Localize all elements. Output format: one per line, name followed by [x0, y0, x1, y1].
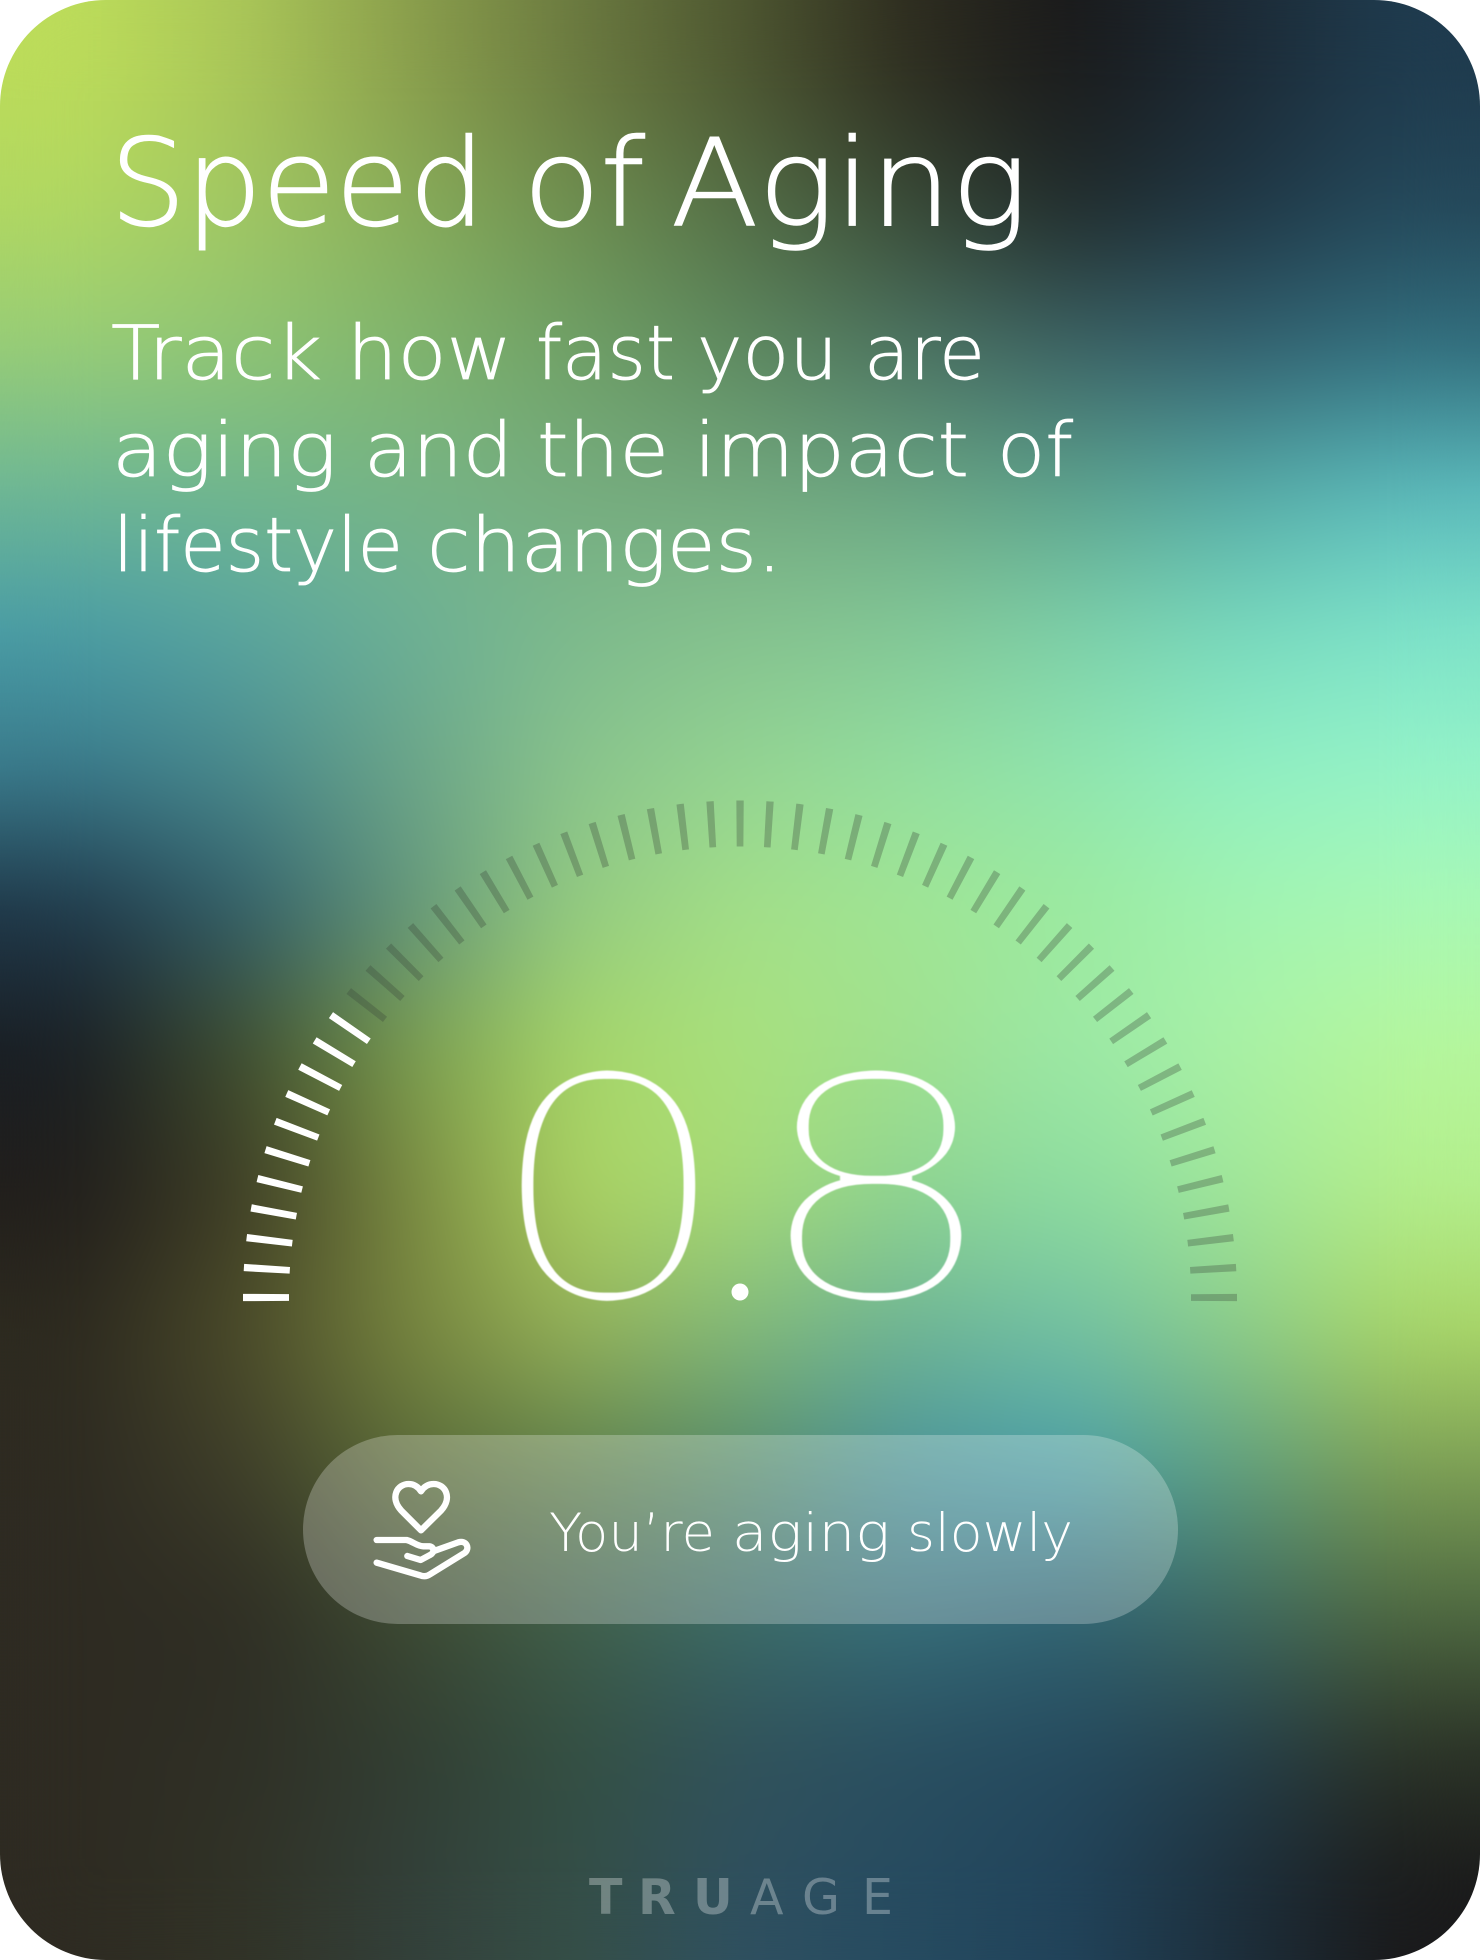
status label: [550, 1511, 1070, 1562]
gauge value: .: [679, 1012, 806, 1372]
gauge remaining ticks: [346, 800, 1237, 1302]
icon: heart in open hand: [377, 1484, 467, 1576]
subtitle text block: aging: [112, 406, 337, 494]
title: Aging: [671, 115, 1028, 254]
brand wordmark: TRU AGE: [589, 1869, 893, 1926]
gauge value: 8: [749, 1012, 1003, 1372]
status label: You’re: [549, 1503, 715, 1564]
status pill: [303, 1435, 1178, 1624]
foreground content: [112, 132, 1237, 1914]
gauge: semicircle tick dial: [243, 800, 1237, 1302]
gauge filled ticks: [264, 1025, 354, 1301]
status label: aging: [732, 1503, 890, 1564]
title: of: [523, 115, 645, 254]
subtitle text block: the: [537, 406, 669, 494]
subtitle text block: [111, 309, 1074, 589]
subtitle text block: fast: [536, 309, 675, 397]
subtitle text block: how: [347, 309, 512, 397]
subtitle text block: changes.: [427, 501, 782, 589]
gauge value: 0: [482, 1012, 736, 1372]
status label: slowly: [907, 1503, 1073, 1564]
subtitle text block: Track: [111, 309, 322, 397]
subtitle text block: you: [697, 309, 838, 397]
gauge value: [521, 1070, 962, 1302]
subtitle text block: and: [364, 406, 513, 494]
title: Speed: [110, 115, 485, 254]
subtitle text block: lifestyle: [113, 501, 403, 589]
subtitle text block: of: [997, 406, 1074, 494]
subtitle text block: are: [864, 309, 985, 397]
title: [120, 132, 1019, 251]
subtitle text block: impact: [694, 406, 969, 494]
